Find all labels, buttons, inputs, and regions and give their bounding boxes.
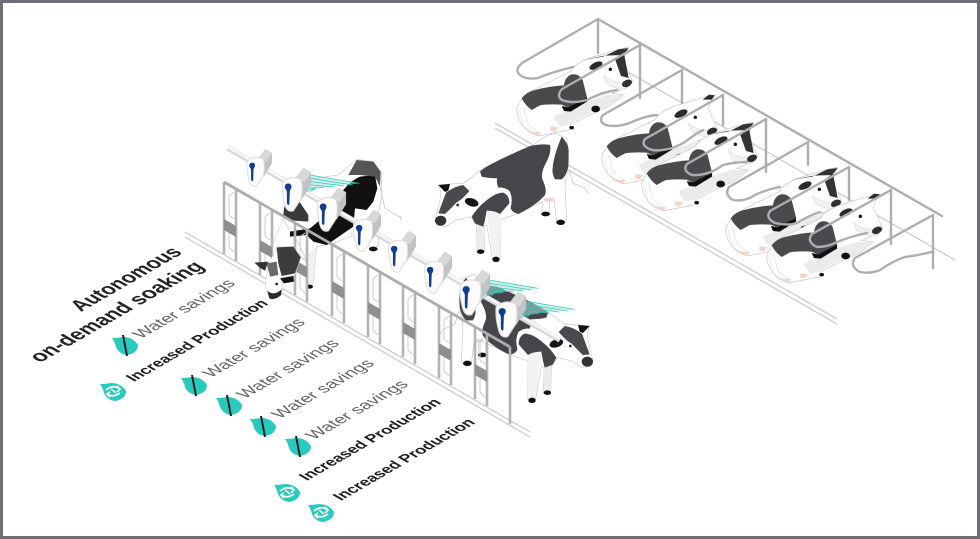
unit 2 xyxy=(282,168,311,211)
cow 2 xyxy=(602,95,718,185)
cow 4 xyxy=(726,167,842,257)
legend: water savings 2 xyxy=(181,315,310,396)
sprayer units xyxy=(247,149,526,337)
milking fence xyxy=(224,182,510,424)
legend: increased production 2: Increased Production xyxy=(296,396,446,483)
legend: water savings 4: Water savings xyxy=(267,356,379,421)
legend: increased production 3 xyxy=(308,416,480,522)
unit 7 xyxy=(460,270,490,315)
legend: water savings 4 xyxy=(250,356,379,437)
spray: right cow front xyxy=(484,279,538,297)
floor rails: parlour xyxy=(185,232,530,437)
spray: right cow rear xyxy=(520,300,574,318)
legend: water savings 5 xyxy=(285,377,413,457)
unit 5 xyxy=(388,231,416,272)
legend: water savings 5: Water savings xyxy=(301,377,413,442)
standing cow: centre xyxy=(435,133,588,262)
stall dividers xyxy=(517,19,942,273)
standing cow: right, behind fence xyxy=(440,274,593,403)
legend: increased production 3: Increased Production xyxy=(330,416,480,503)
unit 6 xyxy=(424,252,452,293)
legend: increased production 2 xyxy=(274,396,446,502)
cow 5 xyxy=(767,194,883,284)
standing cow: left, lowered head xyxy=(254,247,301,300)
unit 8 xyxy=(496,292,526,337)
legend: water savings 1: Water savings xyxy=(128,276,240,341)
legend: water savings 3: Water savings xyxy=(232,336,344,401)
cow 1 xyxy=(517,47,633,137)
legend: water savings 1 xyxy=(112,276,240,356)
floor rails: stall curb xyxy=(495,72,955,324)
unit 3 xyxy=(317,188,346,231)
unit 1 xyxy=(247,149,272,187)
overhead pipe xyxy=(228,147,560,340)
standing cow: left, body xyxy=(273,159,402,289)
heading: Autonomous xyxy=(64,243,188,315)
legend: water savings 3 xyxy=(216,336,344,416)
legend: water savings 2: Water savings xyxy=(198,315,310,380)
lying cows xyxy=(517,47,883,284)
legend: increased production 1 xyxy=(100,297,273,401)
water spray fans xyxy=(305,174,574,318)
cow 3 xyxy=(642,122,758,212)
heading: on-demand soaking xyxy=(23,257,210,366)
legend: increased production 1: Increased Production xyxy=(123,297,273,384)
spray: left cow xyxy=(305,174,359,192)
unit 4 xyxy=(353,210,381,251)
